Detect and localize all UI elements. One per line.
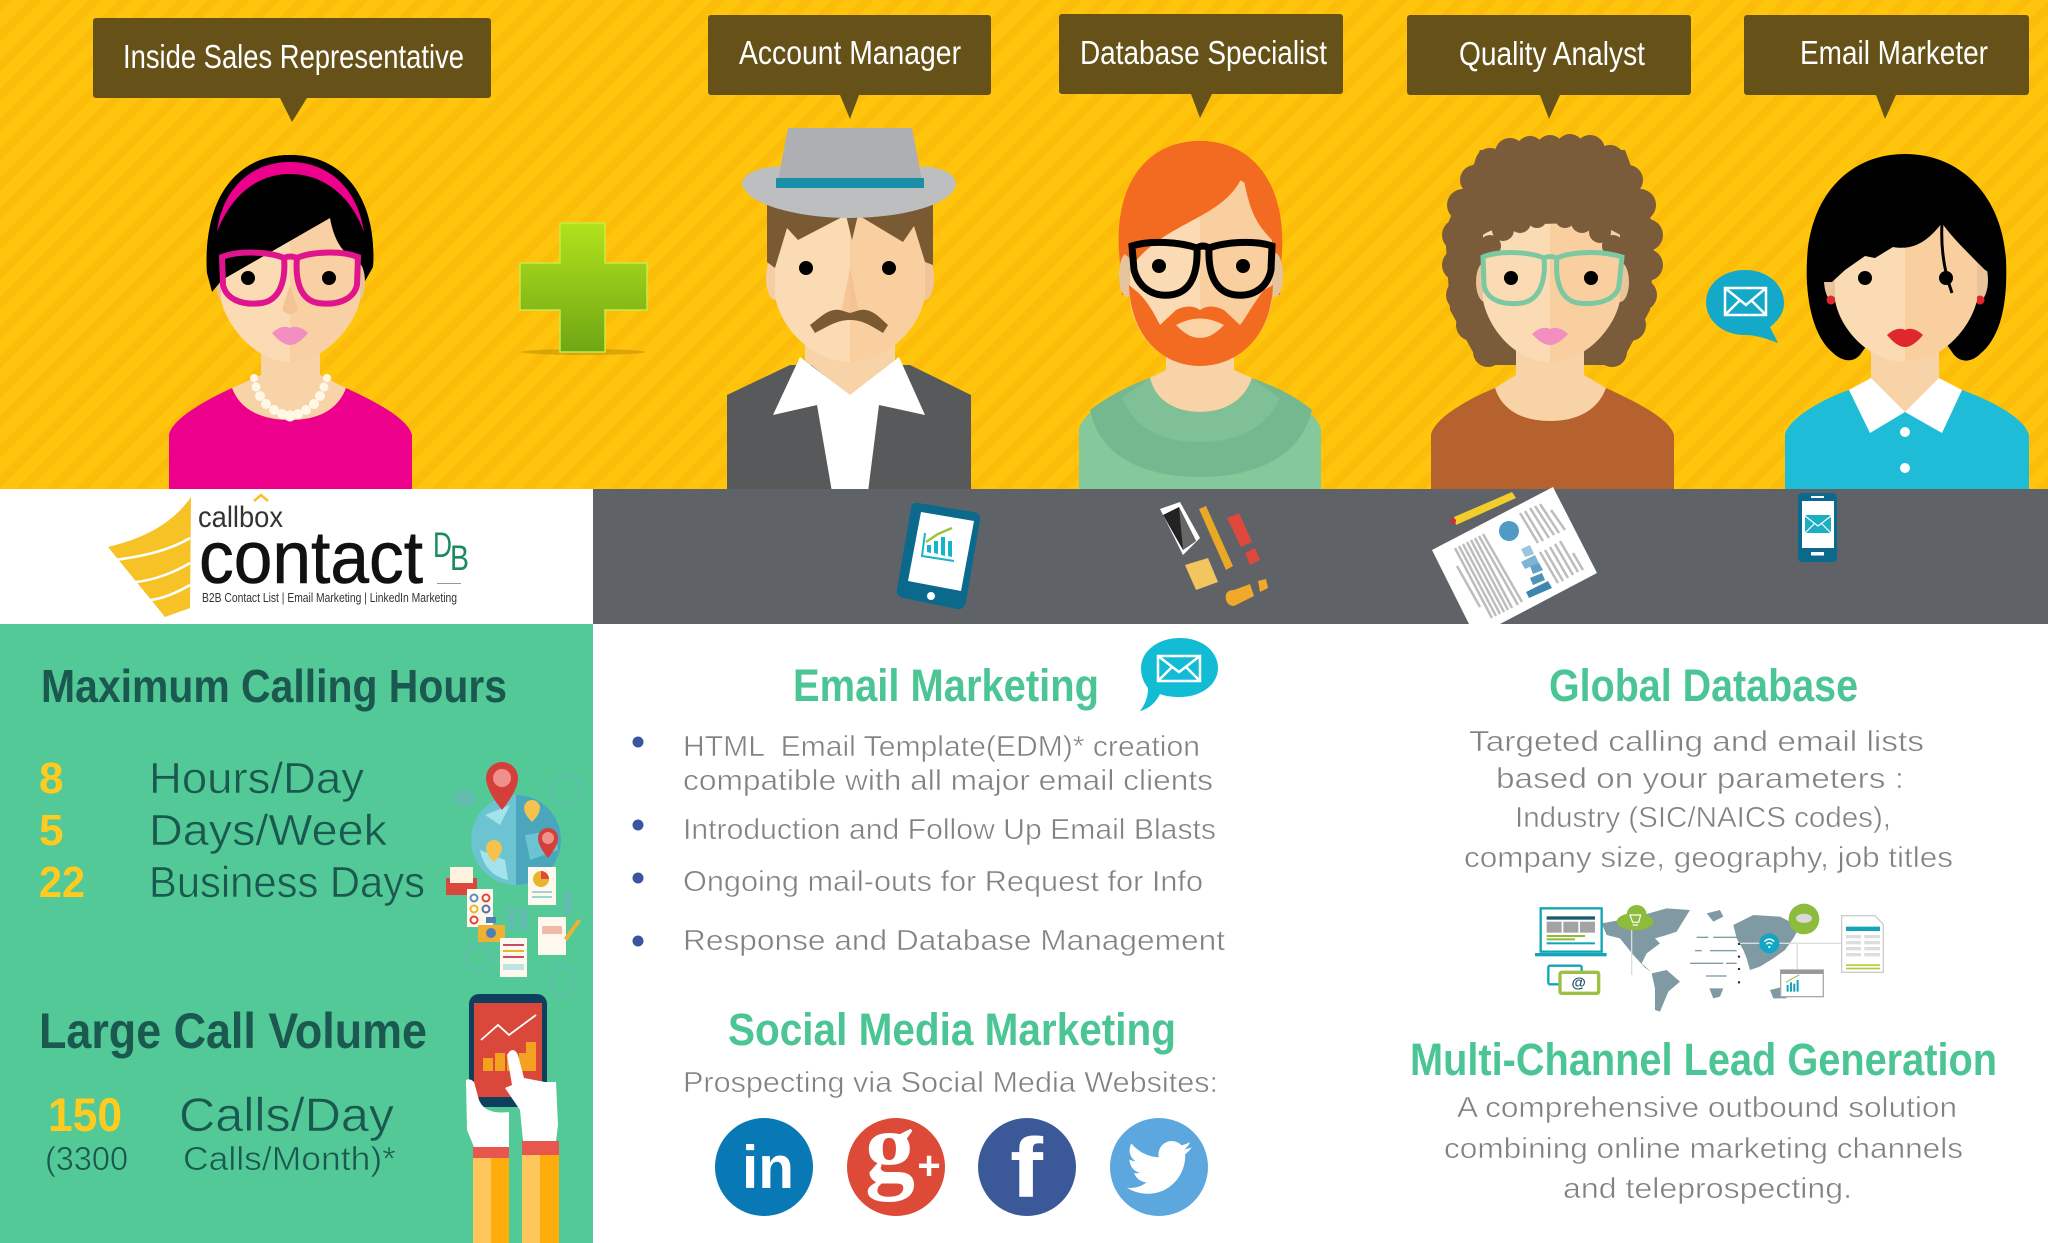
logo: callbox contact DB: contact bbox=[199, 516, 423, 599]
stat: 5 days per week bbox=[39, 806, 388, 855]
stat: 22 business days: Business Days bbox=[149, 858, 425, 907]
speech bubble: Inside Sales Representative: Inside Sales Representative bbox=[123, 38, 464, 75]
email marketing bullet list: HTML Email Template(EDM)* creation bbox=[683, 731, 1200, 763]
icon: report paper and pencil bbox=[1432, 487, 1597, 624]
text: prospecting via social media: Prospecting via Social Media Websites: bbox=[683, 1067, 1218, 1099]
character: account manager with hat bbox=[727, 128, 971, 492]
panel: dark icon strip bbox=[593, 489, 2048, 624]
speech bubble: Inside Sales Representative bbox=[93, 18, 491, 122]
speech bubble: Database Specialist bbox=[1059, 14, 1343, 118]
stat: 3300 calls per month bbox=[45, 1140, 396, 1177]
icon: desk tools bbox=[1160, 502, 1268, 606]
email marketing bullet list: Response and Database Management bbox=[683, 925, 1225, 957]
speech bubble: Email Marketer: Email Marketer bbox=[1800, 34, 1988, 71]
text: global database description: Industry (SIC/NAICS codes), bbox=[1515, 802, 1891, 834]
logo: callbox contact DB: callbox bbox=[198, 501, 283, 534]
email marketing bullet list: compatible with all major email clients bbox=[683, 765, 1213, 797]
character: database specialist with beard bbox=[1079, 141, 1321, 489]
illustration: world map and devices: @ bbox=[1572, 976, 1586, 992]
speech bubble: Database Specialist: Database Specialist bbox=[1080, 34, 1327, 71]
icon: Facebook bbox=[978, 1118, 1076, 1216]
icon: email bubble bbox=[1140, 638, 1218, 711]
stat: 3300 calls per month: Calls/Month)* bbox=[183, 1140, 396, 1177]
icon: green plus bbox=[520, 223, 647, 355]
heading: Large Call Volume: Large Call Volume bbox=[39, 1003, 427, 1059]
text: global database description bbox=[1464, 726, 1953, 874]
stat: 8 hours per day: Hours/Day bbox=[149, 754, 364, 803]
panel: yellow team banner bbox=[0, 0, 2048, 489]
speech bubble: Quality Analyst bbox=[1407, 15, 1691, 119]
icon: Facebook: f bbox=[1010, 1121, 1044, 1215]
heading: Global Database: Global Database bbox=[1549, 660, 1858, 711]
stat: 5 days per week: 5 bbox=[39, 806, 63, 855]
stat: 150 calls per day: 150 bbox=[48, 1088, 122, 1141]
icon: Google Plus: g bbox=[865, 1091, 915, 1202]
logo: callbox contact DB bbox=[108, 495, 469, 617]
text: multi-channel description bbox=[1444, 1092, 1963, 1205]
email marketing bullet list: Ongoing mail-outs for Request for Info bbox=[683, 866, 1203, 898]
stat: 3300 calls per month: (3300 bbox=[45, 1140, 128, 1177]
text: global database description: based on your parameters : bbox=[1496, 763, 1904, 795]
speech bubble: Quality Analyst: Quality Analyst bbox=[1459, 35, 1645, 72]
stat: 150 calls per day bbox=[48, 1088, 395, 1141]
stat: 8 hours per day: 8 bbox=[39, 754, 63, 803]
panel: logo strip bbox=[0, 489, 593, 624]
speech bubble: Account Manager bbox=[708, 15, 991, 119]
character: email marketer woman bbox=[1785, 154, 2029, 489]
speech bubble: Account Manager: Account Manager bbox=[739, 34, 961, 71]
stat: 8 hours per day bbox=[39, 754, 364, 803]
logo: callbox contact DB: B bbox=[450, 539, 469, 578]
heading: Maximum Calling Hours: Maximum Calling Hours bbox=[41, 660, 507, 712]
icon: Google Plus bbox=[847, 1091, 945, 1216]
email marketing bullet list: Introduction and Follow Up Email Blasts bbox=[683, 814, 1216, 846]
illustration: hands holding phone bbox=[466, 994, 559, 1243]
text: multi-channel description: and teleprospecting. bbox=[1563, 1173, 1852, 1205]
icon: tablet with chart bbox=[897, 503, 980, 609]
stat: 150 calls per day: Calls/Day bbox=[179, 1088, 395, 1141]
panel: green stats bbox=[0, 624, 593, 1243]
illustration: globe with pins and documents bbox=[446, 762, 582, 994]
email marketing bullet list bbox=[632, 731, 1225, 957]
icon: teal email speech bubble bbox=[1706, 270, 1784, 343]
text: global database description: Targeted calling and email lists bbox=[1469, 726, 1924, 758]
character: inside sales woman bbox=[169, 155, 412, 489]
heading: Email Marketing: Email Marketing bbox=[793, 660, 1099, 711]
character: quality analyst with curly hair bbox=[1431, 134, 1674, 489]
icon: Google Plus: + bbox=[917, 1144, 941, 1188]
text: global database description: company size, geography, job titles bbox=[1464, 842, 1953, 874]
icon: Twitter bbox=[1110, 1118, 1208, 1216]
stat: 22 business days bbox=[39, 858, 425, 907]
logo: callbox contact DB: B2B Contact List | Email Marketing | LinkedIn Marketing bbox=[202, 591, 457, 605]
text: multi-channel description: combining online marketing channels bbox=[1444, 1133, 1963, 1165]
stat: 5 days per week: Days/Week bbox=[149, 806, 388, 855]
icon: LinkedIn bbox=[715, 1118, 813, 1216]
speech bubble: Email Marketer bbox=[1744, 15, 2029, 119]
logo: callbox contact DB: D bbox=[433, 526, 452, 565]
stat: 22 business days: 22 bbox=[39, 858, 85, 907]
heading: Social Media Marketing: Social Media Marketing bbox=[728, 1004, 1176, 1055]
icon: smartphone with envelope bbox=[1798, 493, 1837, 562]
illustration: world map and devices bbox=[1535, 904, 1883, 1012]
text: multi-channel description: A comprehensive outbound solution bbox=[1457, 1092, 1957, 1124]
icon: LinkedIn: in bbox=[742, 1134, 794, 1201]
